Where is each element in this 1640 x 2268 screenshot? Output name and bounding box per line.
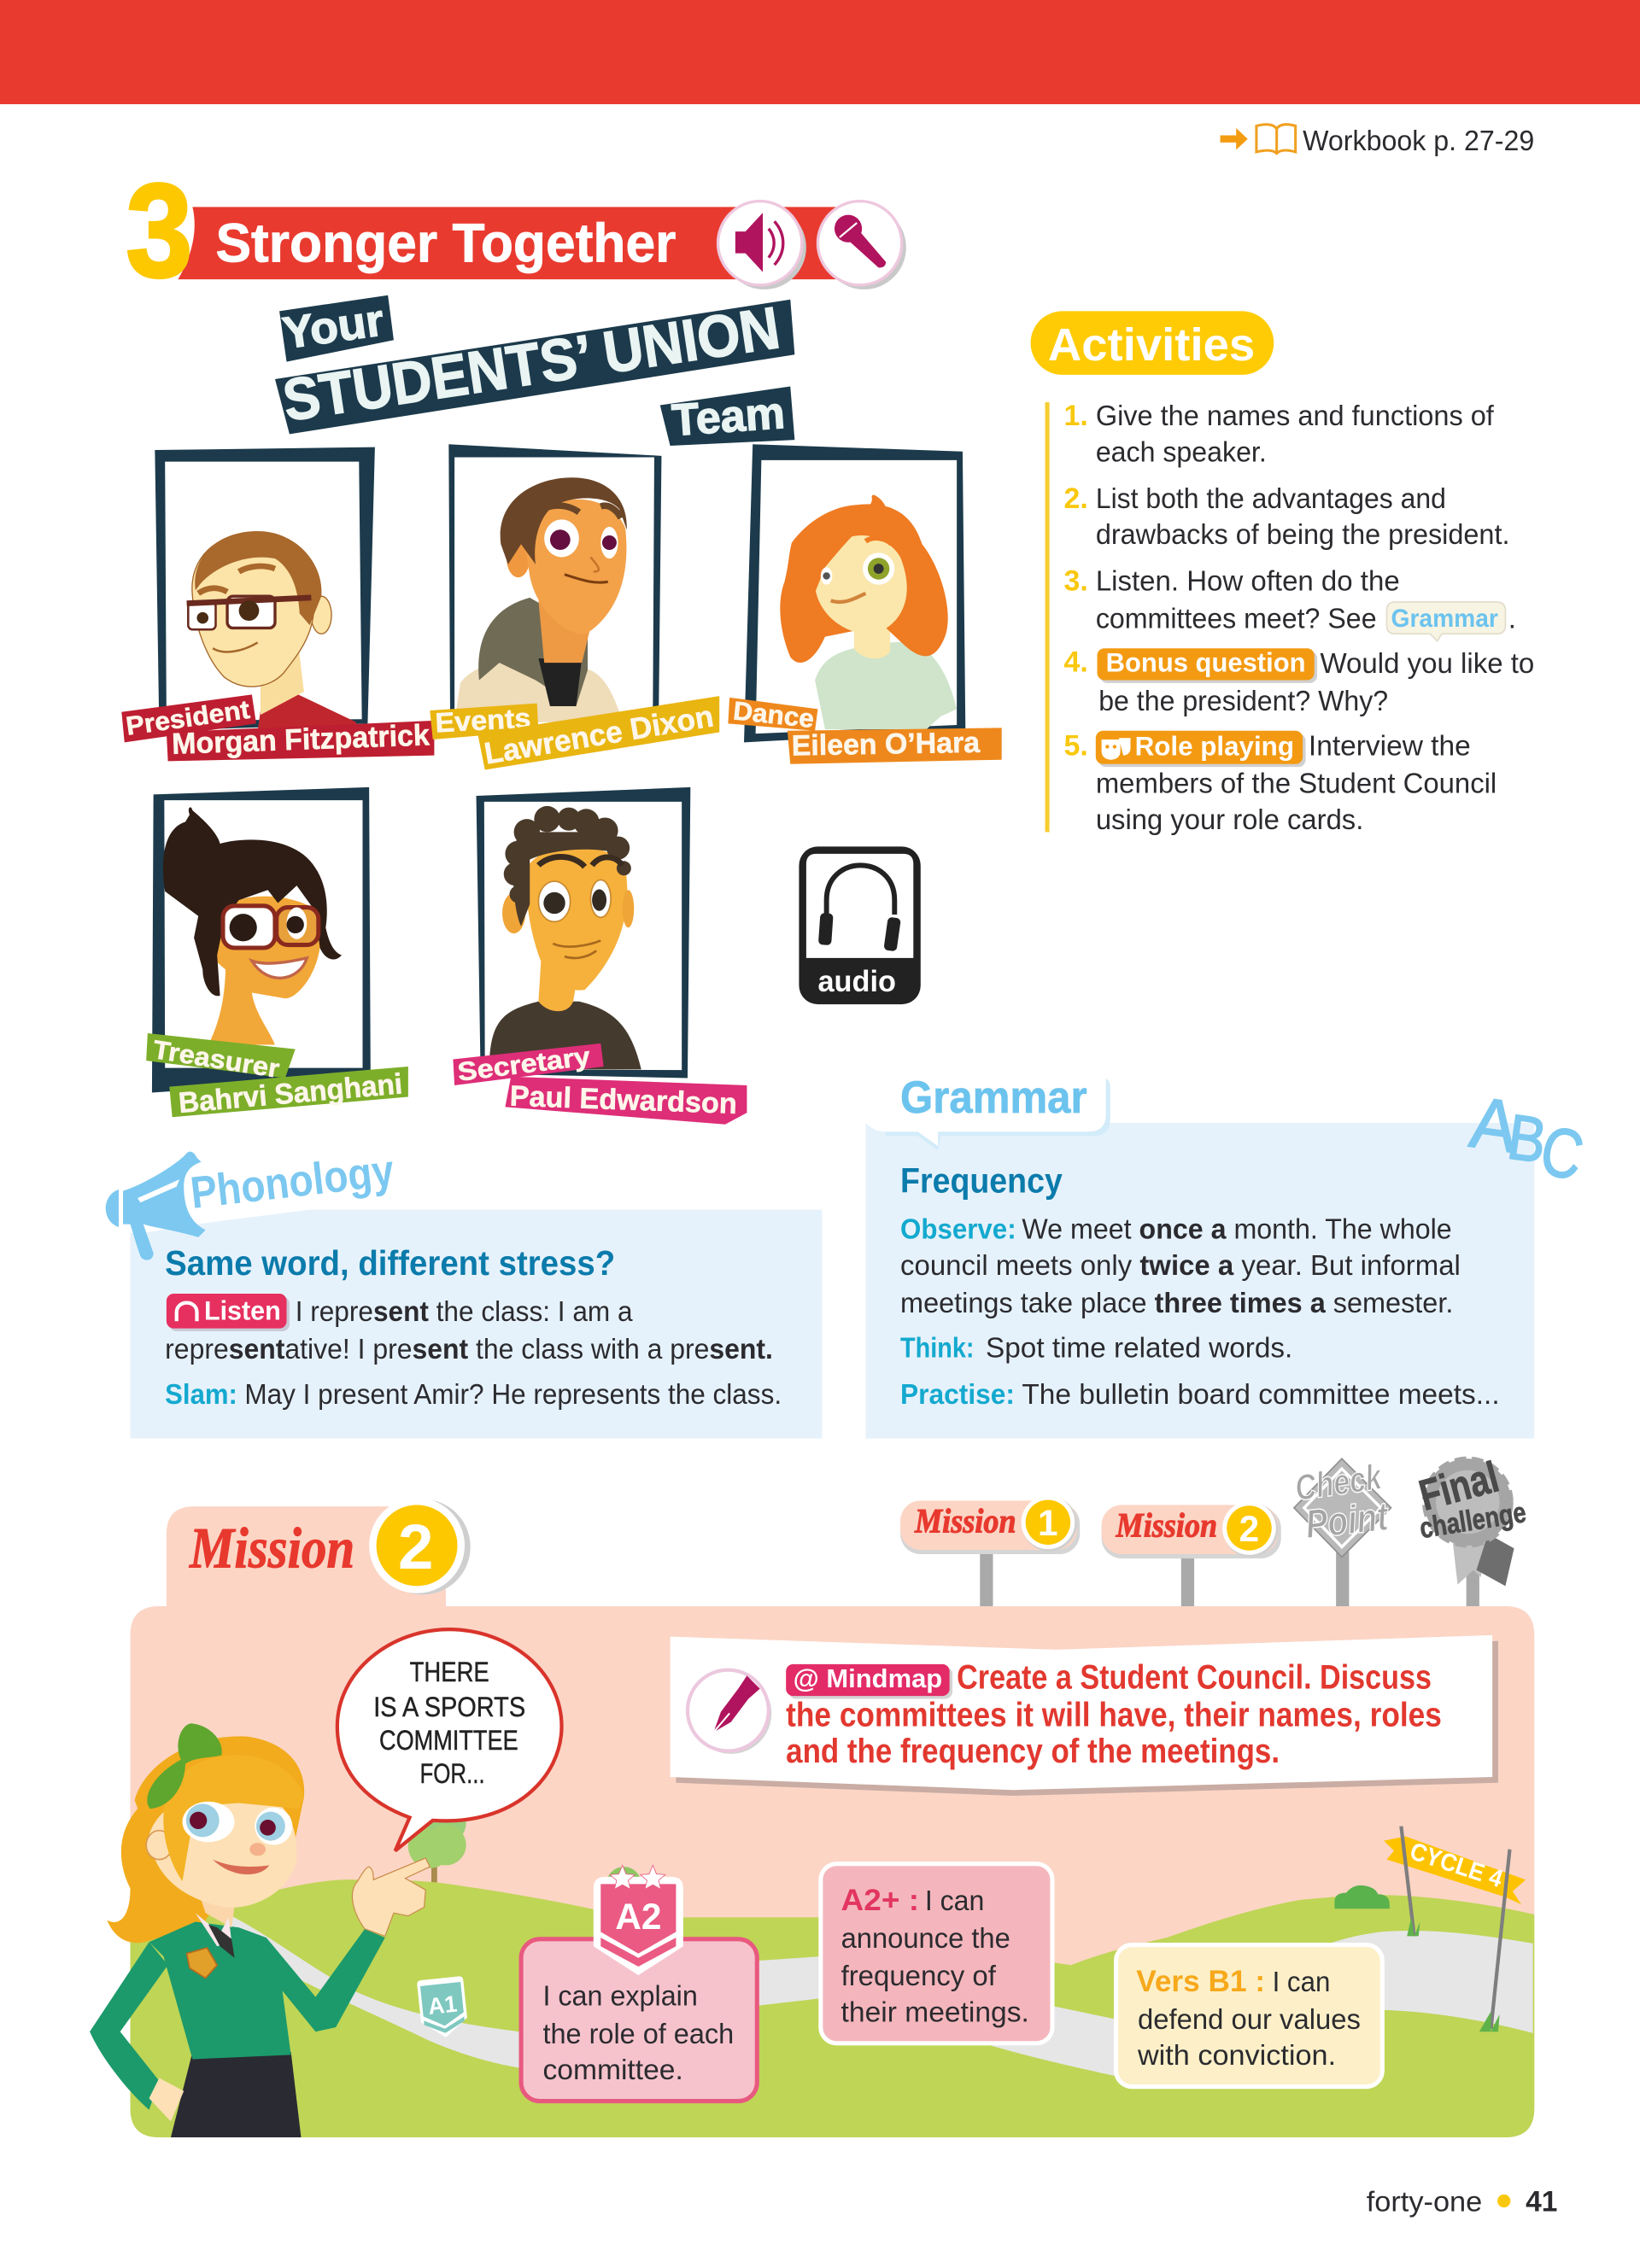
chip: Mindmap: @ Mindmap <box>794 1664 942 1693</box>
mindmap task card: and the frequency of the meetings. <box>786 1733 1280 1770</box>
chip: Grammar <box>1386 602 1505 641</box>
slam line: Slam: <box>165 1379 237 1411</box>
level box: Vers B1 <box>1116 1945 1382 2087</box>
task text: Create a Student Council. Discuss <box>957 1659 1432 1697</box>
nose <box>249 1843 266 1856</box>
activity 4: Would you like to <box>1320 648 1534 680</box>
hair back <box>135 1736 304 1867</box>
banner poles <box>1401 1827 1509 2029</box>
activity 2: List both the advantages and <box>1096 483 1446 515</box>
panel: phonology: representative! I present the class with a present. <box>165 1334 773 1365</box>
icon: megaphone <box>106 1152 206 1260</box>
ABC letters: B <box>1503 1101 1550 1177</box>
icon: headphones <box>818 865 901 951</box>
signpost: Final Challenge <box>1414 1453 1528 1609</box>
level box: A2 <box>521 1939 757 2101</box>
badge: A1 <box>417 1976 469 2040</box>
arm left <box>90 1942 168 2110</box>
signpost: Mission 1 <box>900 1495 1080 1609</box>
ponytail <box>107 1809 231 1943</box>
activities heading pill <box>1031 311 1274 375</box>
activity 3: . <box>1508 603 1516 634</box>
panel: phonology: May I present Amir? He represents the class. <box>244 1379 782 1411</box>
mindmap task card <box>671 1635 1498 1796</box>
observe text: meetings take place three times a semester. <box>900 1288 1453 1319</box>
level box: A2: the role of each <box>542 2019 734 2050</box>
bubble shape <box>337 1629 562 1850</box>
grass tufts <box>1407 1917 1500 2031</box>
icon: microphone <box>817 202 906 289</box>
activity 3: committees meet? See <box>1096 603 1377 634</box>
collar and tie <box>196 1913 231 1946</box>
signpost: Check Point: Point <box>1303 1493 1391 1547</box>
role label: President: President <box>124 695 251 741</box>
character <box>187 531 358 731</box>
character <box>163 807 342 1045</box>
signpost: Mission 2: Mission <box>1116 1506 1217 1545</box>
panel: mission <box>90 1498 1534 2137</box>
portrait: Lawrence Dixon <box>430 444 719 771</box>
portrait: Paul Edwardson <box>453 787 747 1125</box>
practise text: The bulletin board committee meets... <box>1022 1379 1500 1411</box>
activity 2 <box>1064 482 1509 551</box>
audio text: audio <box>817 964 896 998</box>
red title band <box>178 207 869 279</box>
cycle banner <box>1384 1836 1526 1904</box>
activity 5: Interview the <box>1309 731 1471 763</box>
signpost: Mission 2 <box>1102 1501 1281 1609</box>
badge <box>799 846 921 1004</box>
activities side rule <box>1046 402 1050 832</box>
name label: Lawrence Dixon: Lawrence Dixon <box>482 699 716 771</box>
grammar speech tab <box>865 1071 1110 1150</box>
neck <box>200 1896 236 1927</box>
cycle banner: CYCLE 4 <box>1407 1838 1506 1893</box>
character <box>489 806 641 1069</box>
dot <box>1497 2195 1510 2207</box>
lesson number: 3 <box>126 157 192 306</box>
activity 1 <box>1064 400 1495 469</box>
icon: arrow <box>1221 128 1248 149</box>
landscape <box>131 1804 1534 2137</box>
level box: Vers B1: defend our values <box>1138 2004 1361 2036</box>
level box: A2+: A2+ : <box>841 1883 919 1917</box>
Your label: Your <box>279 295 387 359</box>
card <box>671 1635 1492 1790</box>
chip: Grammar: Grammar <box>1391 605 1498 633</box>
grammar background <box>865 1123 1534 1438</box>
activity 3: Listen. How often do the <box>1096 565 1400 597</box>
page word: forty-one <box>1367 2186 1482 2218</box>
panel: phonology <box>106 1145 823 1438</box>
page footer <box>1367 2185 1557 2218</box>
mindmap task card: the committees it will have, their names, roles <box>786 1697 1442 1734</box>
badge crest <box>187 1948 217 1979</box>
face <box>149 1788 297 1908</box>
badge: A2: A2 <box>615 1897 661 1937</box>
portrait: Bahrvi Sanghani <box>146 787 408 1119</box>
signpost: Final Challenge: Final <box>1414 1453 1503 1520</box>
frame <box>448 444 661 723</box>
level box: Vers B1: I can <box>1273 1967 1330 1998</box>
activity 2: 2. <box>1064 482 1088 515</box>
observe text: council meets only twice a year. But informal <box>900 1250 1461 1282</box>
activity 5 <box>1064 730 1496 836</box>
level box: A2+: announce the <box>841 1923 1010 1955</box>
arm right <box>266 1929 385 2031</box>
level box: A2+: their meetings. <box>841 1996 1029 2028</box>
page number: 41 <box>1526 2185 1557 2218</box>
name label: Paul Edwardson: Paul Edwardson <box>509 1080 737 1120</box>
chip: Role playing <box>1096 731 1306 767</box>
grammar heading: Grammar <box>900 1073 1087 1123</box>
icon: headphones small <box>177 1303 196 1321</box>
level box: A2+: I can <box>925 1885 984 1917</box>
chip: Role playing: Role playing <box>1135 732 1294 762</box>
ABC letters: C <box>1534 1111 1590 1195</box>
level box: Vers B1: with conviction. <box>1137 2040 1336 2072</box>
icon: speaker <box>718 202 806 289</box>
mission number badge <box>369 1498 471 1594</box>
workbook text: Workbook p. 27-29 <box>1303 126 1534 157</box>
activity 4: 4. <box>1064 646 1088 678</box>
level box: A2+: frequency of <box>841 1961 997 1992</box>
ear <box>146 1831 173 1860</box>
activity 1: each speaker. <box>1096 437 1267 469</box>
hair bow <box>147 1723 222 1809</box>
level box: A2+ <box>821 1864 1052 2043</box>
bangs <box>163 1755 304 1881</box>
subheading: Same word, different stress? <box>165 1243 615 1283</box>
signpost: Mission 1: Mission <box>914 1502 1016 1540</box>
portrait: Eileen O'Hara <box>728 444 1002 764</box>
observe text: We meet once a month. The whole <box>1022 1214 1452 1246</box>
signpost: Check Point <box>1292 1456 1391 1609</box>
activity 2: drawbacks of being the president. <box>1096 519 1509 551</box>
listen sentence: I represent the class: I am a <box>296 1296 633 1328</box>
mission heading: Mission <box>189 1516 354 1580</box>
hills <box>131 1879 1534 2137</box>
tree <box>408 1804 466 1888</box>
activity 5: using your role cards. <box>1096 804 1363 836</box>
activity 1: 1. <box>1064 400 1088 432</box>
chip: Listen <box>167 1294 290 1331</box>
signpost: Final Challenge: challenge <box>1417 1496 1528 1545</box>
think text: Think: <box>900 1333 974 1365</box>
mouth <box>213 1860 269 1874</box>
speech bubble: IS A SPORTS <box>373 1692 525 1722</box>
title text: Stronger Together <box>215 213 676 274</box>
frame <box>152 787 371 1092</box>
observe text: Observe: <box>900 1214 1016 1246</box>
speech bubble: FOR... <box>419 1758 485 1789</box>
path road <box>231 1916 1533 2077</box>
audio icon <box>799 846 921 1004</box>
activity 3 <box>1064 564 1516 641</box>
level box: A2: I can explain <box>542 1981 698 2013</box>
observe text <box>900 1214 1461 1319</box>
frame <box>477 787 690 1078</box>
role label: Secretary: Secretary <box>456 1042 592 1087</box>
signpost: Mission 1: 1 <box>1038 1503 1058 1543</box>
portrait: Morgan Fitzpatrick <box>121 447 434 761</box>
activity 1: Give the names and functions of <box>1096 400 1495 432</box>
mission background <box>131 1506 1534 2137</box>
card shadow <box>676 1641 1498 1796</box>
level box: Vers B1: Vers B1 : <box>1136 1964 1265 1998</box>
chip: Bonus question: Bonus question <box>1106 647 1306 677</box>
hand pointing <box>352 1858 430 1936</box>
panel: activities <box>1031 311 1534 836</box>
name label: Eileen O'Hara: Eileen O’Hara <box>791 727 981 763</box>
name label: Bahrvi Sanghani: Bahrvi Sanghani <box>178 1067 403 1119</box>
hand left <box>149 2078 184 2121</box>
role label: Events: Events <box>435 703 531 738</box>
activity 4 <box>1064 646 1534 717</box>
far bush <box>606 1867 641 1902</box>
mission number badge: 2 <box>398 1511 433 1582</box>
speech bubble <box>337 1629 562 1850</box>
title banner <box>126 157 906 306</box>
frame <box>155 447 375 731</box>
character: girl pointing <box>90 1723 430 2137</box>
progress signposts <box>900 1453 1528 1609</box>
Team label: Team <box>671 388 787 446</box>
sweater body <box>149 1921 291 2059</box>
character <box>454 477 627 722</box>
activities heading pill: Activities <box>1048 319 1255 371</box>
activity 4: be the president? Why? <box>1098 686 1388 717</box>
signpost: Check Point: Check <box>1292 1456 1385 1508</box>
name label: Morgan Fitzpatrick: Morgan Fitzpatrick <box>172 719 430 761</box>
icon: theatre masks <box>1102 738 1130 760</box>
level box: A2: committee. <box>542 2055 683 2086</box>
activity 5: members of the Student Council <box>1096 769 1496 800</box>
activity 5: 5. <box>1064 730 1088 763</box>
think text: Spot time related words. <box>986 1333 1292 1365</box>
icon: pen <box>688 1670 771 1754</box>
role label: Dance: Dance <box>732 696 816 734</box>
phonology heading: Phonology <box>188 1145 396 1219</box>
panel: grammar <box>865 1071 1590 1438</box>
subheading: Frequency <box>900 1160 1063 1200</box>
ABC letters: A <box>1466 1081 1523 1168</box>
signpost: Mission 2: 2 <box>1239 1509 1259 1549</box>
eyes <box>183 1802 292 1845</box>
Students' Union label: STUDENTS’ UNION <box>278 294 784 434</box>
phonology background <box>131 1210 823 1438</box>
right bush <box>1334 1885 1390 1909</box>
top red band <box>0 0 1640 104</box>
workbook reference <box>1221 125 1534 157</box>
bubble text: THERE <box>410 1657 489 1687</box>
character <box>780 495 957 729</box>
heading: Your Students' Union Team <box>275 294 794 446</box>
practise text: Practise: <box>900 1379 1015 1411</box>
skirt <box>171 2052 301 2137</box>
frame <box>744 444 965 742</box>
role label: Treasurer: Treasurer <box>151 1035 282 1084</box>
chip: Listen: Listen <box>204 1296 281 1326</box>
badge: A2 <box>594 1865 683 1975</box>
ABC letters <box>1466 1081 1590 1195</box>
badge: A1: A1 <box>427 1990 459 2020</box>
icon: book <box>1256 125 1296 154</box>
activity 3: 3. <box>1064 564 1088 597</box>
speech bubble: COMMITTEE <box>379 1725 518 1756</box>
